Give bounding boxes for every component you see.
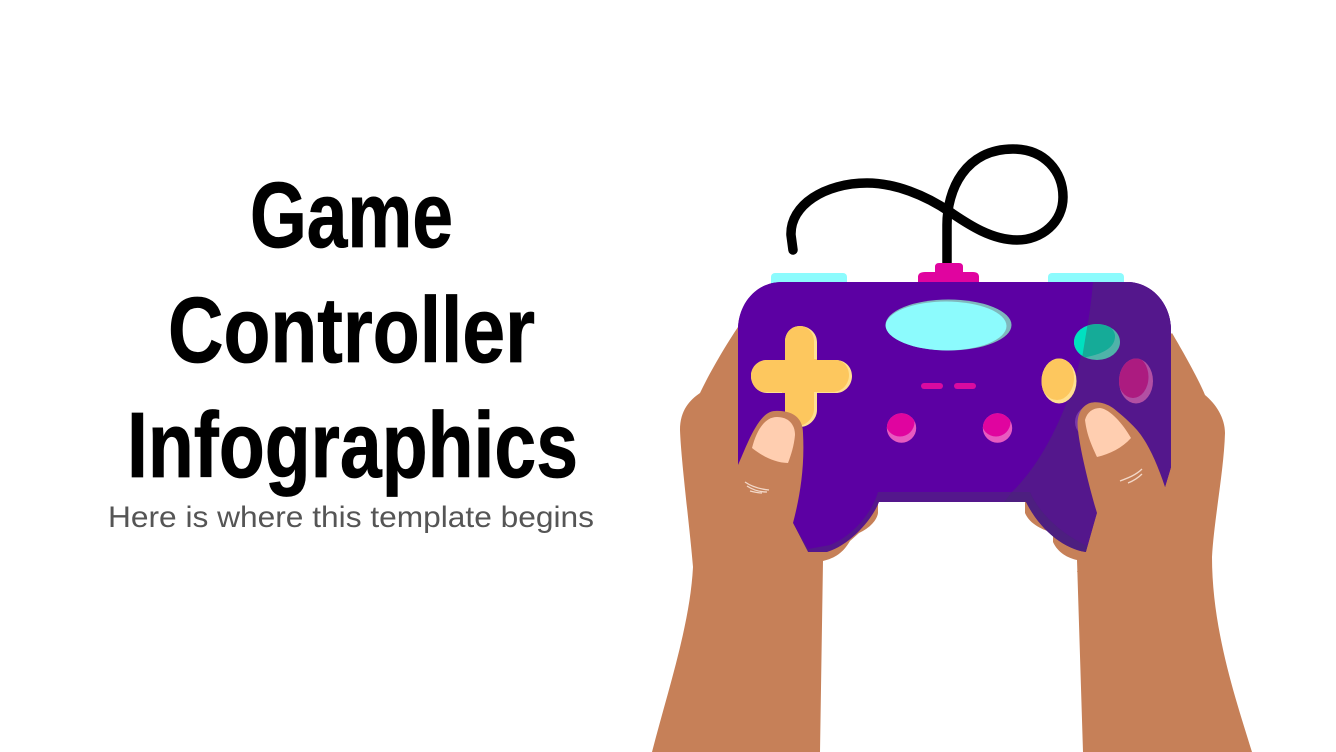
title: Controller — [168, 278, 535, 382]
left round button — [886, 413, 916, 443]
left thumbnail — [752, 417, 795, 463]
teal action button — [1074, 324, 1120, 360]
right thumbnail — [1085, 408, 1131, 457]
left thumb creases — [745, 482, 769, 493]
right round button — [982, 413, 1012, 443]
left thumb — [738, 411, 808, 570]
yellow action button — [1042, 358, 1076, 404]
magenta action button — [1119, 358, 1153, 404]
title — [127, 163, 578, 497]
title: Game — [250, 163, 453, 267]
cable connector — [918, 263, 979, 283]
right shoulder button — [1048, 273, 1124, 289]
controller base shading — [738, 282, 1171, 552]
left arm and hand — [652, 327, 878, 752]
left shoulder button — [771, 273, 847, 289]
subtitle: Here is where this template begins — [108, 501, 594, 534]
screen — [886, 300, 1012, 350]
title: Infographics — [127, 393, 578, 497]
right shaded overlay — [1012, 282, 1171, 546]
hidden action button — [1075, 405, 1111, 439]
start and select buttons — [921, 383, 976, 389]
controller body — [738, 282, 1171, 549]
right thumb — [1077, 402, 1180, 572]
overlay lower edge — [1004, 492, 1087, 552]
illustration: hands holding game controller — [652, 149, 1252, 752]
right thumb creases — [1120, 469, 1142, 483]
right arm and hand — [1025, 333, 1252, 752]
cable — [791, 149, 1063, 264]
directional pad — [751, 326, 852, 427]
